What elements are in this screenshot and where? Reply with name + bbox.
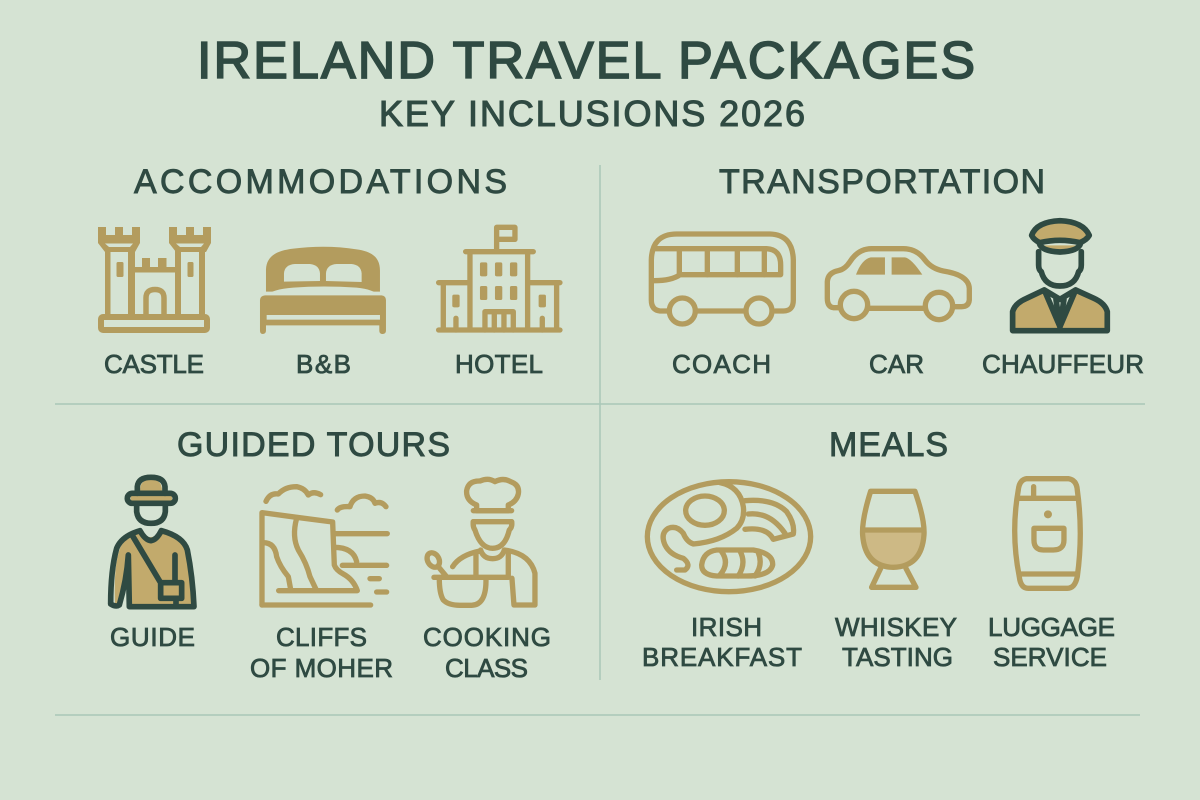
label: cooking class bbox=[423, 622, 551, 683]
label: cliffs of moher: OF MOHER bbox=[250, 653, 393, 683]
label: cooking class: COOKING bbox=[423, 622, 551, 652]
icon: cliffs of moher bbox=[262, 487, 387, 605]
icon: car bbox=[827, 249, 969, 320]
icon: chauffeur bbox=[1013, 221, 1107, 331]
panel: transportation bbox=[651, 163, 1144, 379]
heading: meals: MEALS bbox=[829, 426, 948, 464]
subtitle: KEY INCLUSIONS 2026 bbox=[379, 93, 805, 134]
heading: accommodations: ACCOMMODATIONS bbox=[134, 163, 507, 201]
label: cooking class: CLASS bbox=[445, 653, 528, 683]
label: whiskey tasting: WHISKEY bbox=[835, 612, 957, 642]
label: irish breakfast: IRISH bbox=[691, 612, 762, 642]
label: guide: GUIDE bbox=[110, 622, 195, 652]
panel: guided tours bbox=[110, 426, 551, 683]
label: cliffs of moher: CLIFFS bbox=[276, 622, 367, 652]
panel: accommodations bbox=[98, 163, 560, 379]
label: car: CAR bbox=[869, 349, 924, 379]
icon: castle bbox=[98, 227, 211, 330]
label: whiskey tasting: TASTING bbox=[842, 642, 953, 672]
icon: irish breakfast bbox=[647, 482, 811, 592]
label: chauffeur: CHAUFFEUR bbox=[982, 349, 1144, 379]
label: b&b: B&B bbox=[296, 349, 351, 379]
label: hotel: HOTEL bbox=[455, 349, 543, 379]
label: luggage service: LUGGAGE bbox=[988, 612, 1115, 642]
icon: hotel bbox=[439, 227, 560, 330]
icon: bed bbox=[260, 247, 386, 334]
label: irish breakfast: BREAKFAST bbox=[642, 642, 802, 672]
heading: transportation: TRANSPORTATION bbox=[719, 163, 1045, 201]
label: whiskey tasting bbox=[835, 612, 957, 672]
label: cliffs of moher bbox=[250, 622, 393, 683]
heading: guided tours: GUIDED TOURS bbox=[177, 426, 450, 464]
title: IRELAND TRAVEL PACKAGES bbox=[197, 32, 975, 90]
icon: chef bbox=[425, 479, 535, 605]
label: irish breakfast bbox=[642, 612, 802, 672]
label: castle: CASTLE bbox=[104, 349, 204, 379]
icon: whiskey tasting bbox=[863, 491, 924, 587]
icon: guide bbox=[111, 477, 194, 607]
icon: luggage service bbox=[1015, 479, 1080, 588]
panel: meals bbox=[642, 426, 1115, 672]
label: coach: COACH bbox=[672, 349, 771, 379]
label: luggage service bbox=[988, 612, 1115, 672]
label: luggage service: SERVICE bbox=[993, 642, 1107, 672]
icon: coach bbox=[651, 234, 793, 324]
